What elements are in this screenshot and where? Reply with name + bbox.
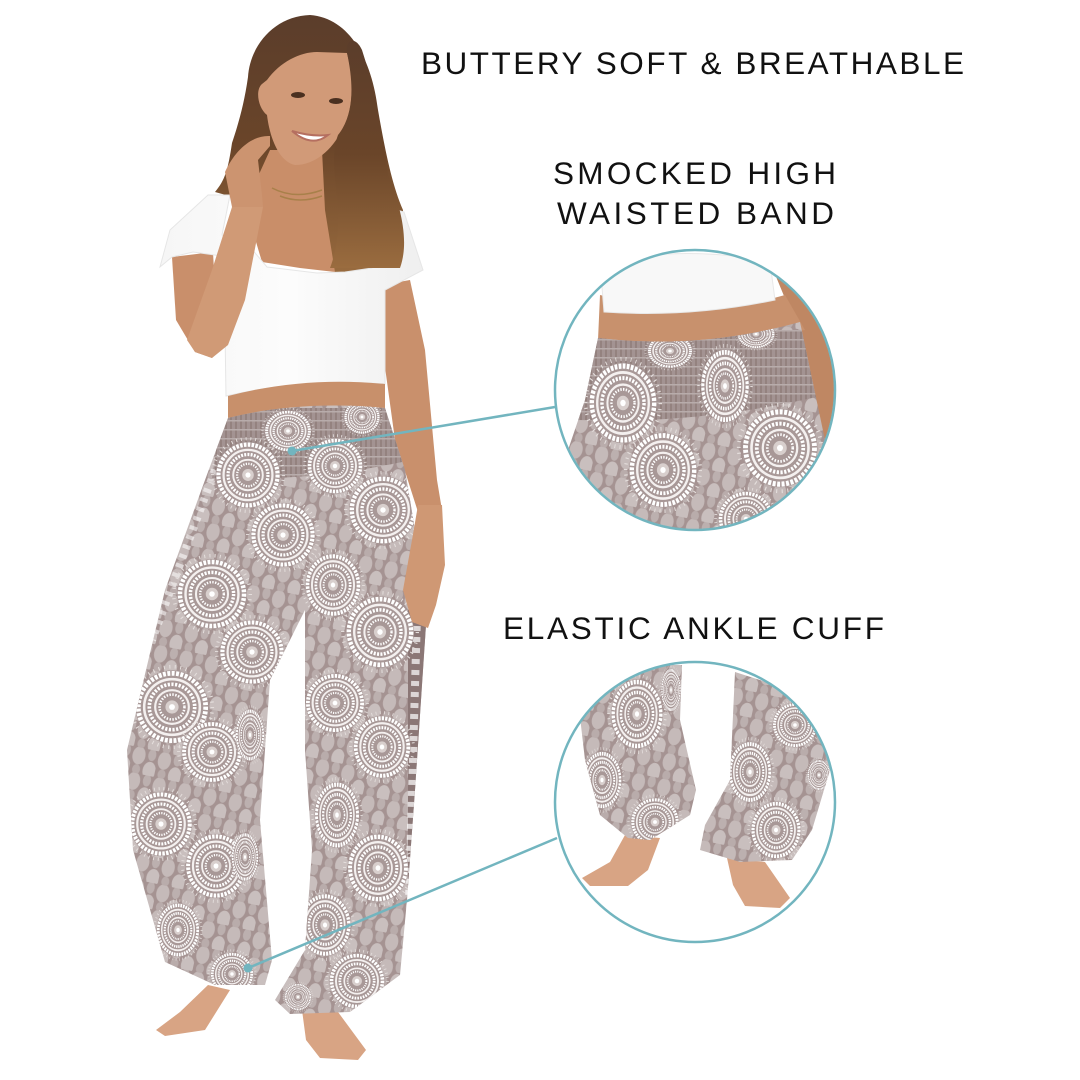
heading: smocked high waisted band [553, 155, 836, 231]
arrow: waistband leader line [288, 407, 555, 456]
midriff [228, 382, 385, 418]
forearm [187, 207, 263, 358]
hand at neck [225, 136, 270, 207]
neck and chest [245, 150, 335, 272]
infographic canvas [127, 15, 963, 1060]
eyes and smile [291, 92, 343, 141]
callout: ankle cuff detail circle [555, 660, 840, 942]
face [258, 52, 352, 165]
pants [120, 398, 440, 1020]
necklace [272, 188, 322, 200]
t-shirt [160, 195, 423, 396]
feet [156, 985, 366, 1060]
heading: elastic ankle cuff: ELASTIC ANKLE CUFF [503, 610, 884, 646]
arrow: ankle cuff leader line [244, 838, 557, 972]
right arm [382, 280, 442, 512]
hair over face side [330, 41, 404, 268]
callout: waistband detail circle [555, 250, 840, 549]
hair back [215, 15, 403, 277]
heading: smocked high waisted band: WAISTED BAND [557, 195, 834, 231]
hand on thigh [403, 505, 445, 628]
upper arm [172, 252, 218, 358]
heading: smocked high waisted band: SMOCKED HIGH [553, 155, 836, 191]
heading: buttery soft: BUTTERY SOFT & BREATHABLE [421, 45, 964, 81]
model figure [120, 15, 445, 1060]
